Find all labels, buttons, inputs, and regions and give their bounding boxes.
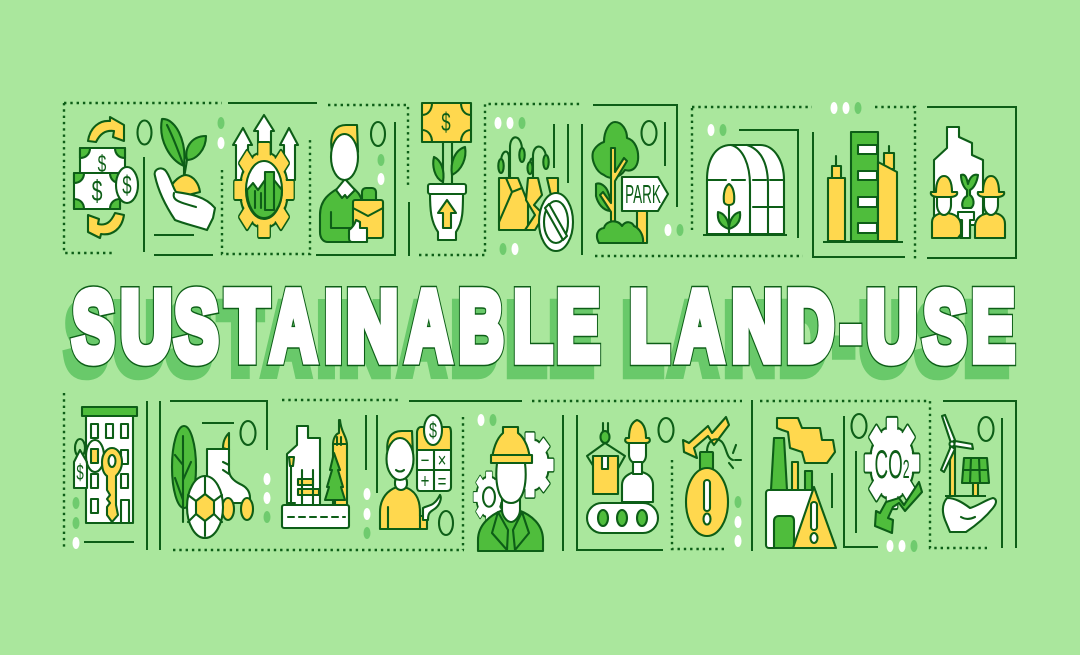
title: SUSTAINABLE LAND-USE: U (114, 285, 165, 395)
title: SUSTAINABLE LAND-USE: D (780, 285, 827, 394)
title: SUSTAINABLE LAND-USE: U (121, 272, 172, 382)
title: SUSTAINABLE LAND-USE: L (514, 272, 552, 381)
icon: hand holding sprout (155, 119, 215, 230)
ring (439, 511, 453, 535)
icon: accountant with calculator: $ (429, 418, 437, 443)
title: SUSTAINABLE LAND-USE: A (270, 272, 316, 381)
icon: lightning arrow (683, 417, 729, 458)
icon: money plant in pot: $ (441, 107, 451, 137)
icon: tree, roller skate and ball (172, 426, 253, 538)
icon: accountant with calculator: × (438, 449, 446, 472)
ring and dots (371, 122, 385, 185)
icon: ring (138, 120, 152, 144)
dots (494, 117, 526, 255)
ring (658, 418, 674, 442)
title: SUSTAINABLE LAND-USE: D (787, 272, 834, 381)
title: SUSTAINABLE LAND-USE: B (452, 286, 496, 395)
title: SUSTAINABLE LAND-USE: L (630, 271, 669, 381)
icon: engineer with gears (473, 427, 554, 551)
title: SUSTAINABLE LAND-USE: - (834, 286, 854, 395)
title: SUSTAINABLE LAND-USE: N (732, 272, 782, 382)
title: SUSTAINABLE LAND-USE: L (514, 272, 552, 381)
icon: accountant with calculator (380, 415, 451, 529)
title: SUSTAINABLE LAND-USE: N (347, 272, 398, 382)
icon: money exchange: $ (92, 175, 102, 208)
icon: money exchange: $ (122, 170, 132, 200)
icon: park tree and sign (593, 122, 668, 243)
title: SUSTAINABLE LAND-USE: E (550, 284, 593, 394)
icon: accountant with calculator: − (421, 449, 429, 472)
title: SUSTAINABLE LAND-USE: E (965, 284, 1008, 394)
title: SUSTAINABLE LAND-USE: - (840, 273, 861, 382)
icon: urban park (282, 420, 349, 528)
title: SUSTAINABLE LAND-USE: E (972, 271, 1015, 381)
title: SUSTAINABLE LAND-USE: D (787, 272, 834, 381)
icon: greenhouse with tulip (707, 145, 784, 235)
title: SUSTAINABLE LAND-USE: T (226, 271, 268, 381)
title: SUSTAINABLE LAND-USE: N (725, 285, 775, 395)
title: SUSTAINABLE LAND-USE: B (459, 273, 503, 382)
icon: accountant with calculator: = (438, 470, 446, 493)
icon: city buildings (828, 132, 897, 241)
icon: money exchange (74, 117, 138, 238)
title: SUSTAINABLE LAND-USE: S (174, 271, 218, 381)
ring and dots (642, 121, 684, 236)
title: SUSTAINABLE LAND-USE: T (226, 271, 268, 381)
dots (218, 117, 224, 149)
title: SUSTAINABLE LAND-USE: A (406, 273, 451, 381)
title: SUSTAINABLE LAND-USE: A (676, 271, 723, 381)
title: SUSTAINABLE LAND-USE: L (507, 285, 545, 394)
dots (708, 124, 726, 136)
title: SUSTAINABLE LAND-USE: E (557, 271, 600, 381)
title: SUSTAINABLE LAND-USE: S (72, 273, 114, 381)
title: SUSTAINABLE LAND-USE: U (867, 272, 917, 382)
title: SUSTAINABLE LAND-USE: U (121, 272, 172, 382)
title: SUSTAINABLE LAND-USE: L (630, 271, 669, 381)
icon: gear with growth arrows (233, 115, 298, 238)
title: SUSTAINABLE LAND-USE: L (623, 284, 662, 394)
icon: bomb with warning (686, 439, 741, 536)
title: SUSTAINABLE LAND-USE: N (732, 272, 782, 382)
title: SUSTAINABLE LAND-USE: S (167, 284, 211, 394)
title: SUSTAINABLE LAND-USE: S (174, 271, 218, 381)
title: SUSTAINABLE LAND-USE: A (399, 286, 444, 394)
title: SUSTAINABLE LAND-USE: B (459, 273, 503, 382)
dots (478, 414, 496, 426)
icon: cracked land with prohibited plants (498, 137, 573, 251)
title: SUSTAINABLE LAND-USE: T (219, 284, 261, 394)
icon: warehouse worker and conveyor (587, 420, 658, 533)
dots (734, 496, 742, 547)
title: SUSTAINABLE LAND-USE: E (972, 271, 1015, 381)
title: SUSTAINABLE LAND-USE: A (670, 284, 716, 394)
title: SUSTAINABLE LAND-USE: S (923, 271, 966, 381)
dots (830, 102, 862, 114)
icon: CO2 gear with down arrow (864, 417, 922, 533)
title: SUSTAINABLE LAND-USE: I (325, 273, 342, 381)
title: SUSTAINABLE LAND-USE: S (72, 273, 114, 381)
icon: CO2 gear with down arrow: CO2 (875, 442, 909, 487)
icon: accountant with calculator: + (421, 470, 429, 493)
icon: money exchange: $ (98, 152, 106, 178)
title: SUSTAINABLE LAND-USE: U (867, 272, 917, 382)
title: SUSTAINABLE LAND-USE: S (916, 284, 959, 394)
title: SUSTAINABLE LAND-USE: N (340, 285, 391, 395)
icon: building with key and price tag (74, 407, 137, 523)
icon: park tree and sign: PARK (625, 180, 661, 209)
title: SUSTAINABLE LAND-USE: E (557, 271, 600, 381)
ring (978, 417, 994, 441)
ring (240, 421, 256, 445)
icon: building with key and price tag: $ (76, 461, 84, 485)
title: SUSTAINABLE LAND-USE: I (318, 286, 335, 394)
title: SUSTAINABLE LAND-USE: S (65, 286, 107, 394)
title: SUSTAINABLE LAND-USE: - (840, 273, 861, 382)
ring (852, 414, 866, 438)
title: SUSTAINABLE LAND-USE: A (406, 273, 451, 381)
title: SUSTAINABLE LAND-USE: U (860, 285, 910, 395)
dots (886, 540, 918, 552)
icon: businessman with briefcase (320, 125, 383, 242)
icon: wind turbine, solar panel and hand (941, 415, 996, 532)
title: SUSTAINABLE LAND-USE: N (347, 272, 398, 382)
title: SUSTAINABLE LAND-USE: A (263, 285, 309, 394)
title: SUSTAINABLE LAND-USE (65, 271, 1015, 395)
title: SUSTAINABLE LAND-USE: I (325, 273, 342, 381)
title: SUSTAINABLE LAND-USE: A (676, 271, 723, 381)
dots (72, 497, 80, 549)
title: SUSTAINABLE LAND-USE: S (923, 271, 966, 381)
dots (264, 473, 270, 523)
icon: factory with pollution warning (766, 418, 836, 548)
dots (364, 488, 370, 539)
title: SUSTAINABLE LAND-USE: A (270, 272, 316, 381)
icon: farmers and sprout before city (931, 127, 1005, 238)
icon: money plant in pot (422, 103, 471, 240)
